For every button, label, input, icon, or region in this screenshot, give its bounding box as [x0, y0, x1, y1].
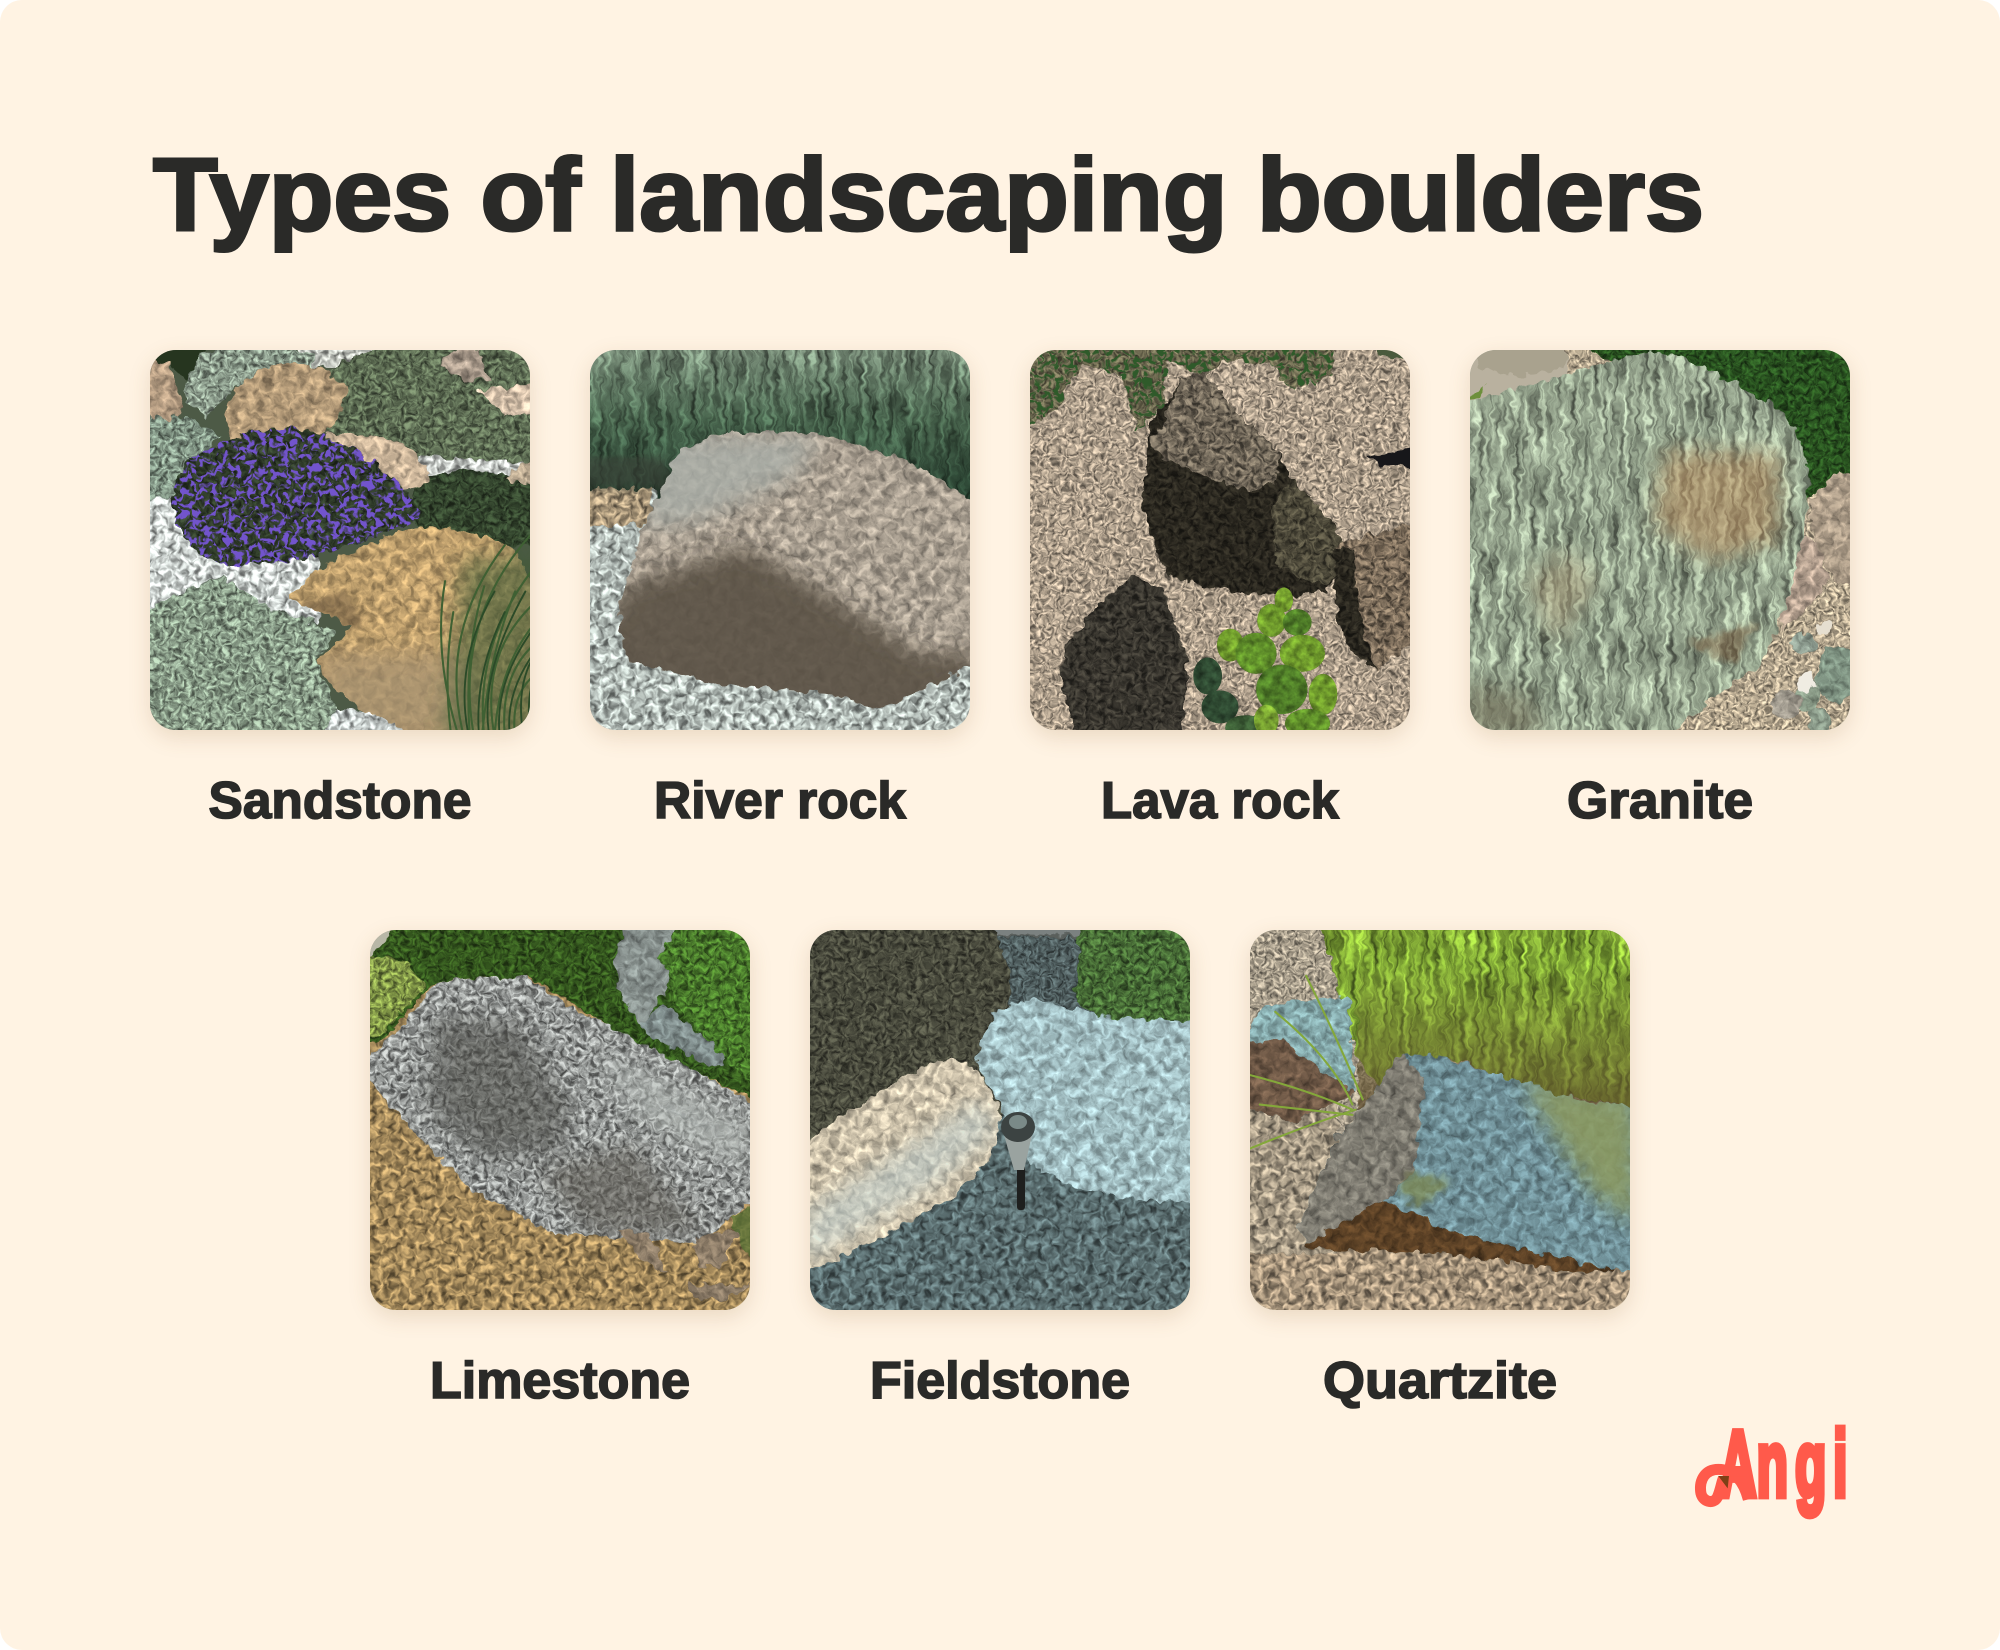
photo: quartzite boulder with green grass [1250, 930, 1630, 1310]
panel: quartzite [1243, 930, 1637, 1410]
quartzite boulder [1296, 1052, 1630, 1274]
garden lamp [1001, 1112, 1035, 1210]
label: River rock: River rock [654, 772, 906, 830]
label: Limestone: Limestone [430, 1352, 690, 1410]
main lava rock [1142, 372, 1350, 597]
panel: river rock [583, 350, 977, 830]
rock top left [134, 359, 182, 421]
tan stone [810, 1058, 1002, 1269]
panel: lava rock [1023, 350, 1417, 830]
fallen leaves [617, 1228, 751, 1300]
photo: fieldstones with garden lamp [810, 930, 1190, 1310]
photo: green-grey granite boulder [1470, 350, 1850, 730]
gravel [574, 488, 986, 746]
ornamental grass [441, 535, 536, 736]
sage bush [134, 576, 337, 746]
panel: granite [1463, 350, 1857, 830]
panel: limestone [363, 930, 757, 1410]
photo: dark lava rocks on gravel [1030, 350, 1410, 730]
left shrub [794, 914, 1015, 1149]
panel: sandstone [143, 350, 537, 830]
logo: Angi: Angi [1719, 1412, 1847, 1516]
foliage [1014, 334, 1426, 432]
label: Lava rock: Lava rock [1101, 772, 1339, 830]
panel: fieldstone [803, 930, 1197, 1410]
photo: sandstone boulders with purple flowers [150, 350, 530, 730]
limestone boulder [370, 974, 750, 1245]
label: Quartzite: Quartzite [1323, 1352, 1557, 1410]
label: Granite: Granite [1567, 772, 1753, 830]
photo: river rock boulder on gravel [590, 350, 970, 730]
blue stone [974, 997, 1190, 1204]
background rocks [1782, 471, 1866, 630]
purple flower bush [172, 427, 418, 564]
right lava rock [1333, 519, 1426, 671]
green grass [1316, 914, 1646, 1110]
bottom left lava rock [1061, 576, 1188, 746]
right shrub [1074, 914, 1206, 1023]
sandstone boulder [288, 526, 530, 730]
green plant [1193, 587, 1337, 740]
title: Types of landscaping boulders [153, 137, 1704, 252]
pebbles [1771, 633, 1858, 738]
photo: grey limestone boulder on tan gravel [370, 930, 750, 1310]
granite boulder [1470, 350, 1812, 730]
rear rock [617, 919, 727, 1068]
rear rock [1234, 996, 1356, 1123]
label: Sandstone: Sandstone [208, 772, 472, 830]
grass blades [1244, 976, 1363, 1151]
right shrub [659, 914, 766, 1099]
label: Fieldstone: Fieldstone [870, 1352, 1130, 1410]
rock top centre [224, 349, 546, 491]
boulder [617, 430, 970, 708]
